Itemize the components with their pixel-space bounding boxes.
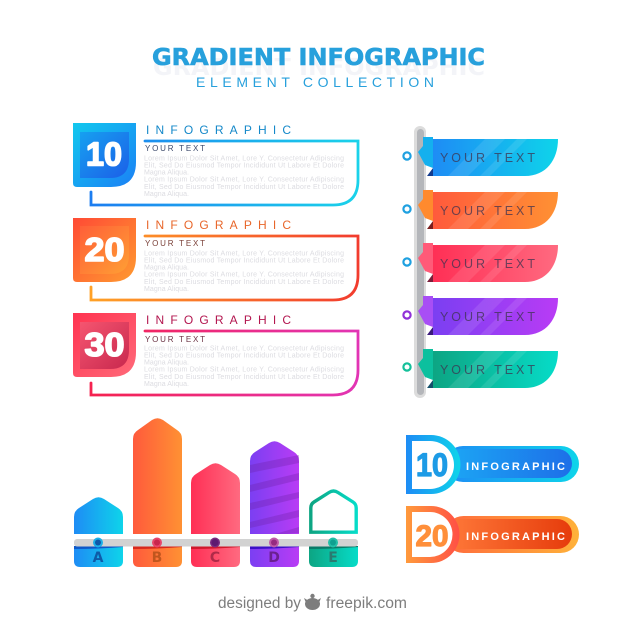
pill xyxy=(445,516,579,553)
label text: INFOGRAPHIC xyxy=(466,531,565,543)
ribbon: blue xyxy=(403,137,558,176)
icon: freepik crown xyxy=(304,594,321,610)
ribbon: green xyxy=(403,349,558,388)
ribbon: orange: YOUR TEXT xyxy=(440,204,535,218)
label tab E xyxy=(309,546,358,567)
title: GRADIENT INFOGRAPHIC xyxy=(152,43,485,71)
D badge xyxy=(406,435,460,494)
body text: Lorem Ipsum Dolor Sit Amet, Lore Y. Consectetur Adipiscing xyxy=(144,366,344,374)
body text xyxy=(144,156,344,198)
label: 10 infographic: 10 xyxy=(416,447,448,483)
bar D xyxy=(250,441,299,534)
label: 20 infographic xyxy=(406,506,579,563)
body text: Lorem Ipsum Dolor Sit Amet, Lore Y. Consectetur Adipiscing xyxy=(144,156,344,162)
label: 20 infographic: 20 xyxy=(416,520,448,553)
footer credit xyxy=(218,594,407,612)
outline frame xyxy=(91,331,358,395)
heading: INFOGRAPHIC xyxy=(146,123,291,137)
axis letters: A xyxy=(93,550,104,566)
panel: 30 xyxy=(73,313,358,395)
axis letters: C xyxy=(210,550,220,566)
body text xyxy=(144,250,344,293)
axis letters: B xyxy=(152,550,162,566)
body text: Elit, Sed Do Eiusmod Tempor Incididunt Ut Labore Et Dolore xyxy=(144,184,344,191)
bar A xyxy=(74,497,123,534)
ribbon: green: YOUR TEXT xyxy=(440,363,535,377)
outline frame xyxy=(91,141,358,205)
label: 10 infographic xyxy=(406,435,579,494)
number badge xyxy=(73,313,136,377)
body text: Elit, Sed Do Eiusmod Tempor Incididunt Ut Labore Et Dolore xyxy=(144,258,344,264)
panel: 20 xyxy=(73,218,358,300)
number badge xyxy=(73,218,136,282)
footer credit: designed by xyxy=(218,595,301,612)
bar E xyxy=(311,491,356,532)
number badge xyxy=(73,123,136,187)
ribbon: red: YOUR TEXT xyxy=(440,257,535,271)
your text: YOUR TEXT xyxy=(145,335,205,344)
panel: 10 xyxy=(73,123,358,205)
axis bar xyxy=(74,539,358,546)
footer credit: freepik.com xyxy=(326,595,407,612)
body text: Magna Aliqua. xyxy=(144,381,189,388)
panel: 20: 20 xyxy=(84,231,124,268)
ribbon: purple: YOUR TEXT xyxy=(440,310,535,324)
ribbon: orange xyxy=(403,190,558,229)
body text: Magna Aliqua. xyxy=(144,286,189,293)
body text: Lorem Ipsum Dolor Sit Amet, Lore Y. Consectetur Adipiscing xyxy=(144,272,344,278)
your text: YOUR TEXT xyxy=(145,144,205,153)
subtitle: ELEMENT COLLECTION xyxy=(196,74,434,90)
axis letters xyxy=(93,550,338,566)
body text: Magna Aliqua. xyxy=(144,360,189,366)
heading: INFOGRAPHIC xyxy=(146,313,291,327)
D badge xyxy=(406,506,460,563)
panel: 10: 10 xyxy=(86,136,122,172)
body text: Elit, Sed Do Eiusmod Tempor Incididunt Ut Labore Et Dolore xyxy=(144,352,344,360)
title: GRADIENT INFOGRAPHIC xyxy=(153,55,485,81)
label text: INFOGRAPHIC xyxy=(466,461,565,473)
body text: Lorem Ipsum Dolor Sit Amet, Lore Y. Consectetur Adipiscing xyxy=(144,346,344,352)
label tab B xyxy=(133,546,182,567)
pill xyxy=(445,446,579,482)
body text: Magna Aliqua. xyxy=(144,170,189,176)
bar chart xyxy=(74,418,358,567)
axis markers xyxy=(93,538,338,548)
body text: Magna Aliqua. xyxy=(144,264,189,272)
pole xyxy=(414,126,426,398)
ribbon: red xyxy=(403,243,558,282)
outline frame xyxy=(91,236,358,300)
bar B xyxy=(133,418,182,534)
panel: 30: 30 xyxy=(84,326,124,363)
label tab C xyxy=(191,546,240,567)
label tab A xyxy=(74,546,123,567)
heading: INFOGRAPHIC xyxy=(146,218,291,232)
body text: Lorem Ipsum Dolor Sit Amet, Lore Y. Consectetur Adipiscing xyxy=(144,176,344,184)
label tab D xyxy=(250,546,299,567)
body text: Elit, Sed Do Eiusmod Tempor Incididunt Ut Labore Et Dolore xyxy=(144,162,344,170)
ribbon: blue: YOUR TEXT xyxy=(440,151,535,165)
axis letters: D xyxy=(268,550,280,566)
body text xyxy=(144,346,344,388)
bar C xyxy=(191,463,240,534)
ribbon: purple xyxy=(403,296,558,335)
body text: Elit, Sed Do Eiusmod Tempor Incididunt Ut Labore Et Dolore xyxy=(144,279,344,286)
body text: Elit, Sed Do Eiusmod Tempor Incididunt Ut Labore Et Dolore xyxy=(144,374,344,381)
your text: YOUR TEXT xyxy=(145,239,205,248)
body text: Lorem Ipsum Dolor Sit Amet, Lore Y. Consectetur Adipiscing xyxy=(144,250,344,258)
body text: Magna Aliqua. xyxy=(144,191,189,198)
axis letters: E xyxy=(328,550,338,566)
